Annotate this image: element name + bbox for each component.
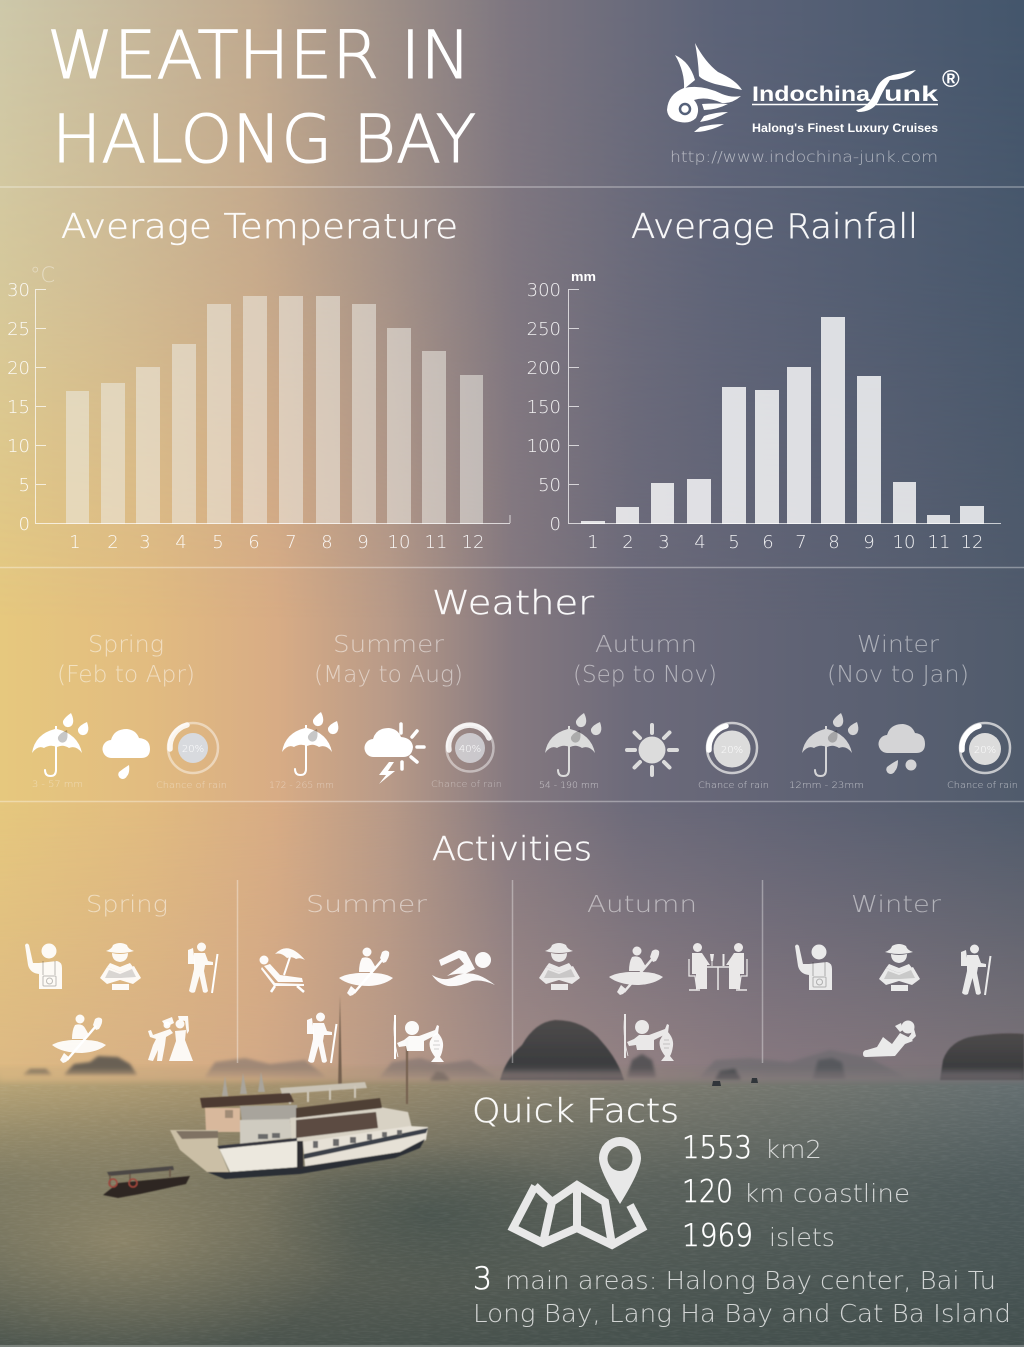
activity season labels: Autumn (587, 892, 697, 918)
weather: summer (269, 712, 502, 791)
title: HALONG BAY (52, 101, 476, 178)
chart: average rainfall: 250 (527, 319, 561, 340)
title (47, 17, 476, 178)
chart: average temperature (7, 263, 510, 553)
activity season labels (86, 892, 942, 918)
logo: Indochina Junk (667, 43, 960, 135)
chart: average rainfall: 50 (538, 475, 561, 496)
icon: sun (627, 725, 677, 775)
chart: average temperature: 3 (139, 532, 151, 553)
title: WEATHER IN (47, 17, 471, 94)
chart: 40% chance of rain (446, 724, 494, 772)
season labels: (Feb to Apr) (57, 662, 195, 688)
chart: average temperature: 6 (248, 532, 260, 553)
activity season labels: Winter (851, 892, 942, 918)
chart: average rainfall: 7 (795, 532, 807, 553)
chart: average temperature: 10 (388, 532, 410, 553)
quick facts text: 3 (473, 1261, 492, 1297)
quick facts text: Long Bay, Lang Ha Bay and Cat Ba Island (473, 1299, 1011, 1328)
quick facts text: main areas: Halong Bay center, Bai Tu (505, 1266, 996, 1295)
chart: average temperature: °C (30, 263, 55, 287)
season labels: Winter (857, 632, 940, 658)
icon: umbrella (282, 712, 338, 775)
chart: average temperature: 0 (19, 514, 30, 535)
quick facts text: 1553 (682, 1130, 752, 1166)
weather: winter: 12mm - 23mm (789, 781, 864, 791)
logo: Indochina Junk: Indochina (752, 83, 870, 106)
icon: umbrella (802, 713, 858, 776)
season labels: Autumn (595, 632, 697, 658)
activity season labels: Spring (86, 892, 168, 918)
chart: average rainfall: 300 (527, 280, 561, 301)
chart: average temperature: 9 (357, 532, 369, 553)
season labels (57, 632, 969, 688)
chart: average rainfall: 0 (550, 514, 561, 535)
heading: Quick Facts: Quick Facts (472, 1091, 679, 1130)
chart: average temperature: 5 (212, 532, 224, 553)
quick facts text (473, 1130, 1011, 1328)
chart: 20% chance of rain: 20% (721, 745, 743, 756)
chart: average rainfall: 6 (762, 532, 774, 553)
heading: Activities: Activities (432, 829, 592, 868)
icon: cloud, sun and lightning (364, 724, 424, 784)
chart: 20% chance of rain: 20% (974, 745, 996, 756)
logo: Indochina Junk: unk (884, 83, 938, 106)
chart: average rainfall: 10 (893, 532, 915, 553)
icon: umbrella (545, 713, 601, 776)
chart: average rainfall: 5 (728, 532, 740, 553)
season labels: (May to Aug) (314, 662, 463, 688)
chart: 20% chance of rain: 20% (182, 744, 204, 755)
photo: cruise ship and tender boat (103, 995, 428, 1198)
activities: winter icons (795, 944, 990, 1057)
temperature bars (66, 296, 483, 524)
chart: 20% chance of rain (960, 723, 1010, 773)
weather: spring (32, 713, 227, 791)
quick facts text: km coastline (744, 1179, 910, 1208)
weather: autumn (539, 713, 769, 791)
activities: summer icons (260, 948, 495, 1063)
chart: average rainfall: 9 (863, 532, 875, 553)
weather: autumn: Chance of rain (698, 781, 769, 791)
rainfall bars (581, 317, 984, 524)
chart: average temperature: 20 (7, 358, 30, 379)
weather: autumn: 54 - 190 mm (539, 781, 599, 791)
season labels: Spring (88, 632, 164, 658)
logo icon: sails and waves (667, 43, 742, 132)
chart: average temperature: 4 (175, 532, 187, 553)
icon: cloud and rain (103, 729, 150, 779)
photo: Halong Bay water and islands (0, 1020, 1024, 1347)
quick facts text: 1969 (682, 1218, 753, 1254)
heading: Weather: Weather (432, 583, 594, 622)
chart: average rainfall: 200 (527, 358, 561, 379)
chart: average temperature: 10 (7, 436, 30, 457)
weather: spring: Chance of rain (156, 781, 227, 791)
chart: 20% chance of rain (707, 723, 757, 773)
website url: http://www.indochina-junk.com (670, 148, 938, 166)
chart: average rainfall: 4 (694, 532, 706, 553)
activities: autumn icons (539, 943, 747, 1061)
chart: average rainfall: 100 (527, 436, 561, 457)
weather: winter: Chance of rain (947, 781, 1018, 791)
season labels: Summer (333, 632, 445, 658)
quick facts text: km2 (765, 1135, 822, 1164)
chart: 20% chance of rain (168, 723, 218, 773)
chart: average temperature: 5 (19, 475, 30, 496)
heading: Average Rainfall: Average Rainfall (631, 207, 918, 247)
chart: average temperature: 2 (107, 532, 119, 553)
chart: average rainfall (527, 269, 1001, 553)
chart: average temperature: 1 (69, 532, 81, 553)
chart: average temperature: 8 (321, 532, 333, 553)
weather: summer: 172 - 265 mm (269, 781, 334, 791)
quick facts text: islets (769, 1223, 835, 1252)
chart: average temperature: 11 (425, 532, 447, 553)
icon: umbrella (32, 713, 88, 776)
chart: 40% chance of rain: 40% (459, 744, 481, 755)
season labels: (Sep to Nov) (573, 662, 717, 688)
logo: Indochina Junk: Halong's Finest Luxury Cruises (752, 121, 938, 135)
chart: average temperature: 25 (7, 319, 30, 340)
chart: average temperature: 12 (462, 532, 484, 553)
weather: winter (789, 713, 1018, 791)
quick facts text: 120 (682, 1174, 733, 1210)
chart: average rainfall: 12 (961, 532, 983, 553)
chart: average temperature: 15 (7, 397, 30, 418)
chart: average temperature: 7 (285, 532, 297, 553)
chart: average temperature: 30 (7, 280, 30, 301)
chart: average rainfall: 3 (658, 532, 670, 553)
chart: average rainfall: 1 (587, 532, 599, 553)
heading: Average Temperature: Average Temperature (61, 207, 458, 247)
chart: average rainfall: 150 (527, 397, 561, 418)
chart: average rainfall: mm (571, 269, 596, 284)
chart: average rainfall: 8 (828, 532, 840, 553)
icon: cloud, rain and snow (879, 724, 925, 774)
chart: average rainfall: 2 (622, 532, 634, 553)
logo: Indochina Junk: ® (942, 66, 960, 93)
weather: summer: Chance of rain (431, 780, 502, 790)
chart: average rainfall: 11 (928, 532, 950, 553)
activities: spring icons (25, 942, 218, 1063)
icon: map with pin (513, 1137, 642, 1245)
season labels: (Nov to Jan) (827, 662, 969, 688)
weather: spring: 3 - 57 mm (32, 780, 83, 790)
activity season labels: Summer (306, 892, 428, 918)
